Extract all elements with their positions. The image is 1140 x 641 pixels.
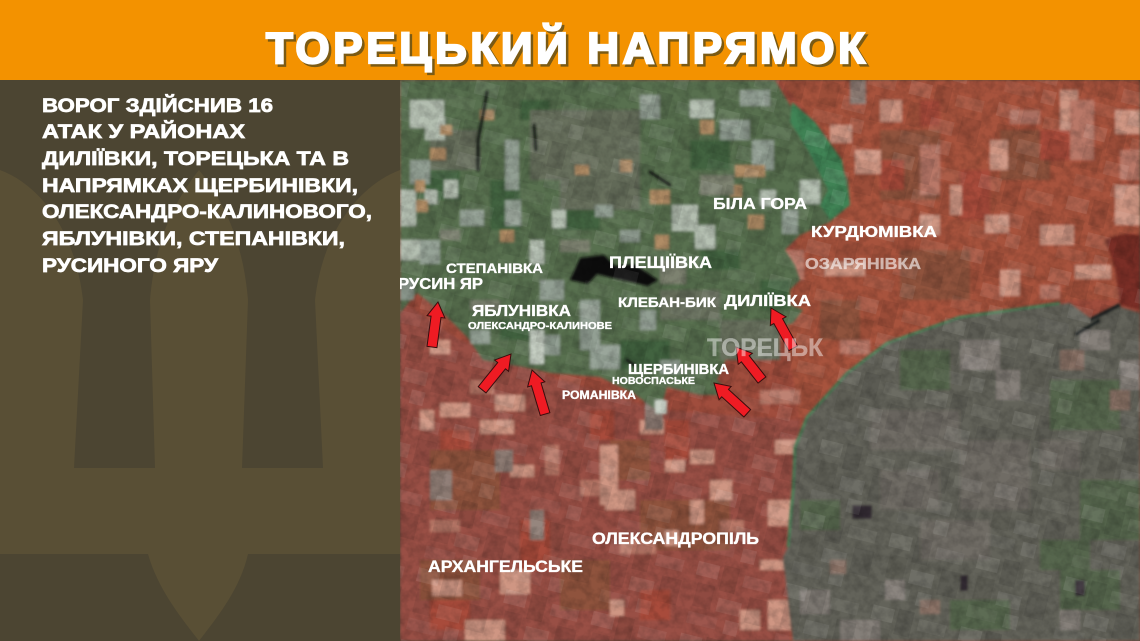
label: Bila Hora: БІЛА ГОРА	[713, 196, 807, 213]
arrows: Russian attack directions	[423, 301, 801, 420]
title: ТОРЕЦЬКИЙ НАПРЯМОК	[266, 22, 865, 73]
title: ТОРЕЦЬКИЙ НАПРЯМОК	[268, 24, 868, 76]
arrow: Shcherbynivka	[713, 382, 752, 418]
label: Romanivka: РОМАНІВКА	[562, 390, 636, 402]
panel: satellite map	[398, 80, 1140, 641]
icon: trident watermark	[0, 170, 400, 641]
header banner	[0, 0, 1140, 80]
text block: attack summary: АТАК У РАЙОНАХ	[42, 121, 245, 143]
map feature: reservoir and ravines	[478, 92, 670, 365]
arrow: Toretsk	[736, 346, 766, 384]
label: Oleksandro-Kalynove: ОЛЕКСАНДРО-КАЛИНОВЕ	[468, 320, 612, 332]
label: Stepanivka: СТЕПАНІВКА	[446, 261, 543, 276]
arrow: Yablunivka	[478, 353, 512, 394]
map zone: occupied territory (red)	[400, 80, 1140, 641]
map grain	[400, 80, 1140, 641]
arrow: Oleksandro-Kalynove	[527, 369, 550, 416]
text block: attack summary: ОЛЕКСАНДРО-КАЛИНОВОГО,	[42, 202, 372, 223]
label: Rusyn Yar: РУСИН ЯР	[398, 276, 483, 293]
label: Ozarianivka: ОЗАРЯНІВКА	[805, 256, 921, 273]
text block: attack summary: РУСИНОГО ЯРУ	[42, 256, 218, 277]
label: Toretsk: ТОРЕЦЬК	[707, 334, 824, 362]
label: Novospaske: НОВОСПАСЬКЕ	[612, 376, 695, 387]
label: Shcherbynivka: ЩЕРБИНІВКА	[628, 361, 729, 378]
label: Yablunivka: ЯБЛУНІВКА	[472, 303, 571, 320]
text block: attack summary: ЯБЛУНІВКИ, СТЕПАНІВКИ,	[42, 229, 345, 250]
text block: attack summary	[42, 95, 372, 277]
map field texture	[400, 80, 1140, 641]
panel: left text panel	[0, 80, 400, 641]
text block: attack summary: НАПРЯМКАХ ЩЕРБИНІВКИ,	[42, 176, 358, 197]
arrow: Rusyn Yar	[426, 301, 446, 348]
label: Diliivka: ДИЛІЇВКА	[724, 292, 812, 310]
arrow: Diliivka	[770, 307, 798, 352]
text block: attack summary: ВОРОГ ЗДІЙСНИВ 16	[42, 95, 273, 117]
text block: attack summary: ДИЛІЇВКИ, ТОРЕЦЬКА ТА В	[42, 149, 349, 170]
label: Kurdiumivka: КУРДЮМІВКА	[811, 224, 938, 241]
label: Arkhanhelske: АРХАНГЕЛЬСЬКЕ	[428, 558, 583, 576]
map zone: occupied urban area (grey)	[783, 303, 1140, 641]
map place labels	[398, 196, 938, 576]
label: Oleksandropil: ОЛЕКСАНДРОПІЛЬ	[592, 530, 759, 548]
map zone: Ukrainian-held territory (green)	[400, 80, 850, 414]
label: Kleban-Byk: КЛЕБАН-БИК	[618, 295, 717, 310]
label: Pleshchiivka: ПЛЕЩІЇВКА	[609, 254, 712, 272]
